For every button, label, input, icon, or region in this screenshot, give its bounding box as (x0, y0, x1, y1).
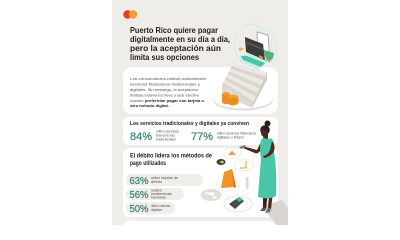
stat row 50%: digitales (151, 208, 162, 212)
stat 84%: 84% (130, 131, 152, 143)
intro text: cuando preferirían pagar con tarjeta o (130, 99, 205, 103)
stat 77%: 77% (191, 131, 213, 143)
phone (257, 32, 270, 62)
title: limita sus opciones (130, 53, 200, 62)
icon: airplane on dish (200, 189, 222, 201)
floor shadow (262, 200, 288, 225)
guide arcs (243, 25, 277, 56)
title (130, 26, 230, 62)
stat row 50% (126, 202, 175, 215)
front arm (263, 141, 274, 158)
stat row 63%: débito (151, 180, 162, 184)
stat 84%: bancos los (156, 134, 175, 138)
stat row 56%: realizó (151, 188, 162, 192)
illustration: woman in teal dress (239, 120, 288, 225)
intro text: otro método digital. (130, 104, 169, 108)
stair side (252, 72, 267, 108)
stat row 63%: utilizó tarjetas de (151, 176, 178, 180)
illustration: stairs with phone and card (213, 20, 279, 111)
legs (263, 192, 268, 209)
card stripe (245, 41, 263, 50)
debit heading: El débito lidera los métodos de (130, 154, 213, 160)
icon: coins on dish (223, 148, 241, 158)
icon: wallet (216, 159, 226, 165)
stat row 56%: 56% (130, 190, 149, 201)
stat row 50%: utilizó carteras (151, 204, 170, 208)
stat 77%: digitales o fintech (217, 136, 244, 140)
debit heading (130, 154, 213, 167)
small orange icon (238, 48, 244, 51)
title: pero la aceptación aún (130, 44, 221, 53)
stat row 56% (126, 188, 184, 201)
hair bun (264, 120, 270, 126)
card (245, 37, 265, 60)
icon: receipt on dish (234, 159, 254, 171)
stat row 56%: bancarias (151, 196, 166, 200)
title: digitalmente en su día a día, (130, 35, 230, 44)
stat 84%: tradicionales (156, 138, 176, 142)
base ellipse (213, 90, 273, 110)
head and neck (261, 129, 268, 139)
logo: two circles (123, 10, 137, 19)
intro text (130, 77, 206, 108)
teal dress (258, 138, 276, 198)
intro text: servicios financieros tradicionales y (130, 82, 200, 86)
stat row 63% (126, 174, 203, 187)
shoes (260, 207, 266, 211)
intro text: Los consumidores utilizan activamente (130, 77, 206, 81)
stat row 56%: transferencias (151, 192, 172, 196)
panel: bottom card (123, 221, 278, 231)
stat 84%: utilizó servicios (156, 130, 179, 134)
stat 77%: utilizó servicios financieros (217, 132, 256, 136)
icon: orange shopping bag (216, 169, 240, 191)
stat 77% (191, 131, 256, 143)
debit heading: pago utilizados (130, 161, 167, 167)
intro text: digitales. Sin embargo, la aceptación (130, 88, 198, 92)
stat row 63%: 63% (130, 176, 149, 187)
title: Puerto Rico quiere pagar (130, 26, 218, 35)
contactless bar (246, 177, 248, 189)
panel: services card (123, 117, 278, 145)
services heading: Los servicios tradicionales y digitales ya conviven (130, 121, 249, 127)
shield (264, 50, 274, 61)
stair risers (222, 66, 265, 105)
panel: debit card (123, 148, 278, 217)
coins (222, 92, 238, 106)
stat 84% (130, 130, 179, 143)
stair treads (222, 63, 267, 105)
top teal platform (240, 53, 270, 70)
left arm extended (243, 140, 263, 154)
stair front base (222, 85, 252, 108)
card in hand (239, 145, 246, 149)
stat row 50%: 50% (130, 204, 149, 215)
icon: card terminal (224, 196, 252, 212)
card chip (259, 55, 263, 59)
panel: intro card (123, 67, 278, 114)
illustration: payment icons (200, 148, 254, 212)
intro text: limitada todavía los lleva a usar efectivo (130, 94, 199, 98)
